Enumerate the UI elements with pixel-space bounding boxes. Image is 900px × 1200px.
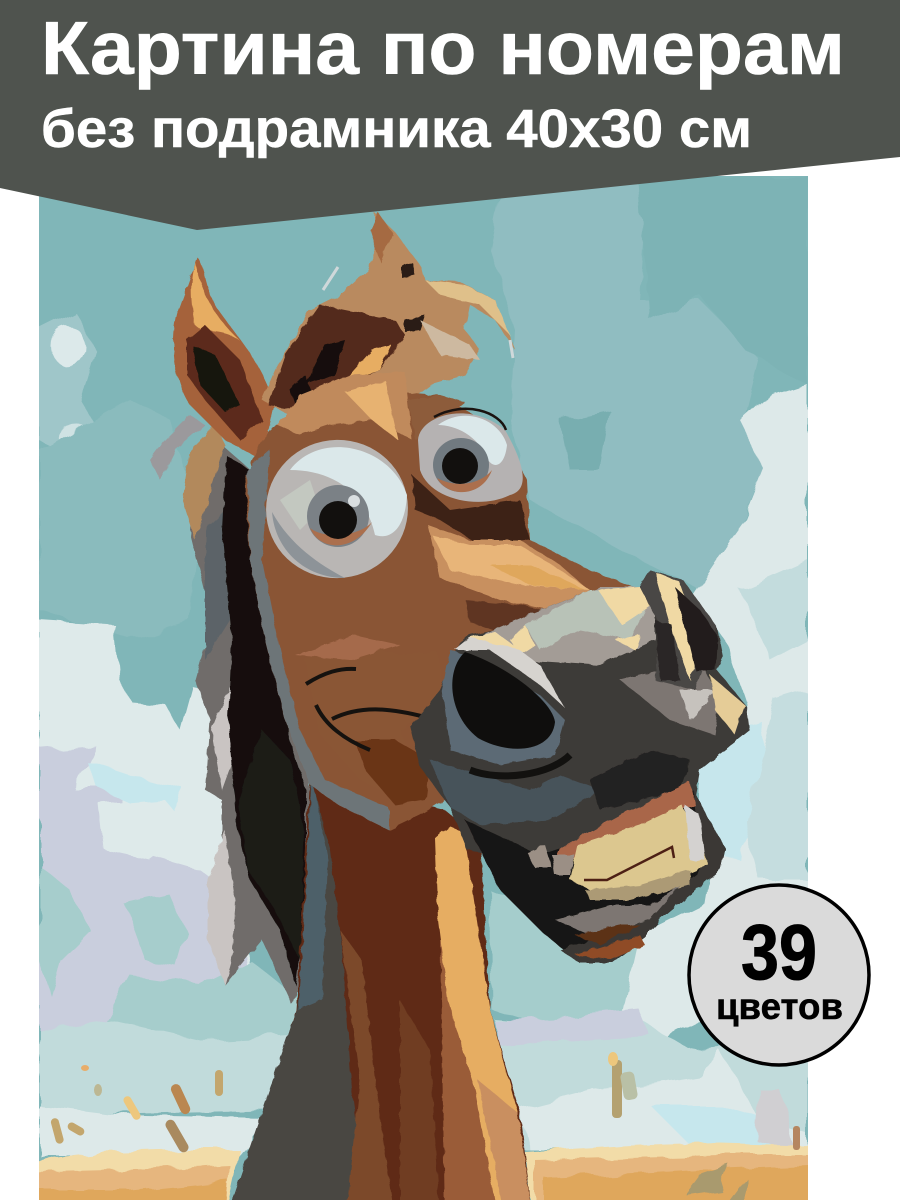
horse: muzzle [410,570,750,860]
horse: neck [225,775,533,1200]
nose crease [470,755,570,776]
horse: left ear [173,257,275,460]
horse: left eye [253,427,421,591]
horse: forelock and right ear [262,212,515,415]
heading: Картина по номерам [41,6,845,90]
ground: field of grass [30,1143,820,1200]
mouth crease lines [306,669,425,750]
painting: sky and clouds background [30,176,820,1200]
horse: right eye [418,409,523,502]
horse: mouth [465,782,725,963]
title banner [0,0,900,230]
forelock wisps [323,267,513,358]
subheading: без подрамника 40х30 см [41,99,752,159]
badge: color count [689,885,869,1065]
teeth line [584,847,674,880]
grass stalks [50,1052,800,1154]
badge: color count: цветов [716,986,843,1027]
horse: mane [150,415,312,1005]
badge: color count: 39 [741,908,817,996]
horse: nostril [452,652,555,749]
horse: head [245,372,640,830]
horse illustration [150,212,750,1200]
